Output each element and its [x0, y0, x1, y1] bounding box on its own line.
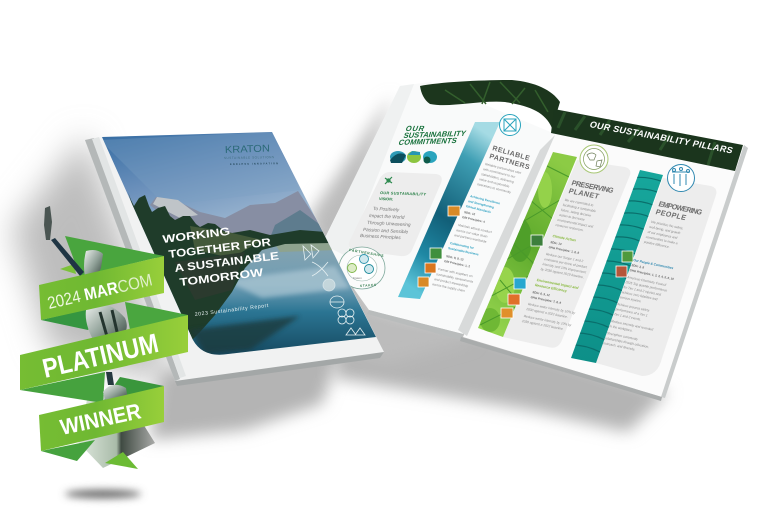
reliable partners text: with commitment to our: [483, 167, 517, 179]
icon: globe: [580, 145, 608, 173]
reliable partners text: Ethical Standards: [466, 204, 492, 214]
right page: [463, 132, 745, 397]
reliable partners text: PARTNERS: [488, 153, 531, 171]
left page heading: OUR: [404, 124, 427, 133]
reliable partners text: GRI Principles: 1, 2: [444, 259, 471, 269]
reliable partners text: across our value chain: [456, 228, 488, 239]
empowering people text: achieve zero fatalities and: [621, 290, 658, 301]
reliable partners text: Sustainable Business: [448, 246, 479, 256]
empowering people text: positive difference.: [643, 240, 671, 249]
reliable partners text: SDG: 12: [464, 210, 476, 216]
cover title: TOMORROW: [179, 267, 264, 289]
forest: [128, 192, 330, 340]
empowering people text: [603, 198, 704, 355]
empowering people text: PEOPLE: [654, 207, 688, 222]
kraton logo: SUSTAINABLE SOLUTIONS: [224, 155, 274, 160]
left page heading: COMMITMENTS: [397, 136, 458, 147]
banner: our sustainability pillars: OUR SUSTAINABILITY PILLARS: [588, 119, 734, 155]
empowering people text: American Chemistry Council: [627, 275, 667, 287]
lake: [152, 240, 376, 355]
preserving planet text: facilitating a sustainable: [562, 203, 597, 213]
partnerships badge: STAKES: [360, 283, 377, 288]
reliable partners text: operations to community: [477, 182, 512, 194]
cover photo: [102, 132, 376, 355]
empowering people text: outreach, and diversity.: [603, 341, 636, 352]
kraton logo: [224, 143, 278, 166]
reliable partners text: RELIABLE: [491, 145, 531, 163]
empowering people text: EMPOWERING: [657, 199, 704, 217]
preserving planet text: GHG Principles: 1, 6, 8: [548, 245, 580, 255]
reliable partners text: Maintain ethical conduct: [458, 223, 492, 234]
partnerships badge: PARTNERSHIPS: [349, 248, 385, 258]
reliable partners text: sustainability assessments: [436, 272, 474, 284]
cover title: A SUSTAINABLE: [174, 250, 280, 275]
reliable partners text: stakeholders, delivering: [481, 172, 514, 184]
icon: reliable partners: [500, 114, 520, 136]
panel: sustainability vision: OUR SUSTAINABILITY: [380, 191, 427, 197]
panel: sustainability vision: Passion and Sensible: [363, 227, 409, 234]
reliable partners text: Reliable partnerships start: [485, 162, 522, 175]
panel: sustainability vision: Impact the World: [369, 213, 405, 220]
SDG icons: preserving: [501, 235, 543, 318]
preserving planet text: by 2030 against 2019 baseline.: [540, 267, 585, 279]
preserving planet text: PRESERVING: [570, 178, 616, 195]
empowering people text: We prioritize the safety,: [651, 220, 684, 230]
empowering people text: communities to make a: [645, 235, 678, 245]
cover subtitle: 2023 Sustainability Report: [195, 303, 269, 318]
preserving planet text: We are committed to: [564, 198, 594, 207]
preserving planet text: action to decrease: [559, 213, 586, 222]
preserving planet text: Reduce our Scope 1 and 2: [545, 252, 584, 263]
empowering people text: serious injuries.: [619, 295, 642, 303]
left page: [322, 82, 553, 334]
partnerships badge: Kraton: [353, 276, 362, 280]
left page heading: [397, 124, 468, 147]
ribbon: Winner: WINNER: [58, 398, 143, 440]
empowering people text: 2025 Top quartile performance: [625, 280, 668, 293]
ribbon: Platinum: PLATINUM: [40, 328, 161, 384]
award floor shadow: [65, 490, 141, 498]
preserving planet text: Environmental Impact and: [536, 278, 579, 290]
reflection highlights: [225, 266, 350, 298]
empowering people text: in the workplace.: [609, 324, 634, 333]
preserving planet text: Climate Action: [552, 234, 576, 242]
ribbon: 2024 MarCom: [39, 256, 164, 320]
reliable partners text: GRI Principles: 4: [462, 215, 486, 224]
preserving planet text: GHG Principles: 7, 8, 9: [530, 295, 562, 305]
preserving planet text: 2030 against a 2022 baseline.: [526, 307, 569, 319]
panel: sustainability vision: VISION:: [379, 197, 394, 202]
cover pillar icons: [303, 245, 365, 335]
left page heading: SUSTAINABILITY: [402, 129, 468, 140]
preserving planet text: PLANET: [567, 186, 601, 201]
preserving planet text: Reduce water intensity by 10% by: [527, 302, 576, 315]
reliable partners text: and Strengthening: [468, 199, 495, 209]
ribbon: 2024 MarCom: 2024 MARCOM: [46, 270, 154, 313]
reliable partners text: Collaborating for: [450, 241, 475, 250]
empowering people text: Tier 1 and 2 events.: [613, 312, 642, 322]
water strip: [398, 122, 500, 299]
ribbon: Platinum: [20, 315, 188, 390]
empowering people text: GHG Principles: 1, 2, 3, 4, 5, 6, 10: [629, 268, 675, 281]
empowering people text: Reduce intensity and recorded: [611, 319, 654, 332]
preserving planet text: [520, 178, 621, 332]
reliable partners text: Partner with suppliers on: [438, 267, 473, 278]
SDG icons: empowering: [616, 251, 633, 277]
background soft shadows: [12, 95, 668, 440]
empowering people text: for Tier 1 and 2 injuries and: [623, 285, 662, 297]
panel: preserving planet: [465, 145, 630, 348]
kraton logo: KRATON: [225, 143, 270, 156]
preserving planet text: intensity and 10% improvement: [542, 262, 587, 274]
back ribbon folds: [20, 236, 188, 469]
three commitment icons: [390, 151, 437, 164]
banner: our sustainability pillars: [551, 109, 743, 171]
preserving planet text: Reduce waste intensity by 10% by: [523, 314, 572, 327]
mountains: [150, 191, 327, 240]
preserving planet text: future, taking decisive: [560, 208, 592, 218]
reliable partners text: and partners worldwide: [454, 233, 487, 244]
cover title: [162, 226, 280, 289]
award: 2024 MarCom Platinum winner: [20, 206, 188, 498]
empowering people text: Achieve process safety: [617, 302, 650, 313]
closed report cover: [85, 125, 390, 386]
icon: people: [668, 164, 694, 192]
icon: vision mark: [385, 177, 392, 184]
reliable partners text: Achieving Excellence: [470, 194, 501, 205]
empowering people text: Strengthen community: [606, 331, 639, 341]
reliable partners text: [432, 145, 531, 293]
cover page block: [85, 140, 384, 386]
preserving planet text: emissions per tonne of product: [544, 257, 588, 269]
empowering people text: relationships through education,: [605, 336, 650, 349]
empowering people text: of our employees and: [647, 230, 678, 240]
preserving planet text: 2030 against a 2022 baseline.: [521, 319, 564, 331]
panel: sustainability vision: [349, 172, 442, 256]
partnerships badge: [339, 247, 385, 289]
panel: sustainability vision: Business Principles: [360, 233, 401, 240]
ribbon: Winner: [39, 386, 164, 451]
trophy base: [78, 395, 155, 468]
kraton logo: ENDLESS INNOVATION: [230, 162, 278, 166]
reliable partners text: value and responsible: [479, 177, 510, 189]
panel: sustainability vision: Through Unwavering: [367, 220, 411, 227]
panel: sustainability vision: To Positively: [373, 206, 400, 212]
preserving planet text: Resource Efficiency: [534, 283, 568, 293]
cover title: WORKING: [162, 226, 231, 246]
empowering people text: well-being, and growth: [649, 225, 681, 235]
empowering people text: performance of a Tier 1: [615, 307, 648, 318]
SDG icons on left page: [418, 206, 460, 287]
preserving planet text: environmental impact and: [557, 218, 594, 229]
trophy figure: [44, 206, 128, 402]
empowering people text: Our People & Communities: [633, 258, 674, 270]
reliable partners text: SDG: 8, 9, 12: [446, 254, 464, 262]
fern banner left: [420, 80, 560, 128]
dark foreground reflection: [190, 316, 300, 354]
preserving planet text: SDG: 6, 9, 12: [532, 290, 551, 297]
reliable partners text: and product stewardship: [434, 277, 469, 288]
preserving planet text: conserve resources.: [555, 223, 584, 232]
reliable partners text: across the supply chain: [432, 282, 465, 293]
preserving planet text: SDG: 13: [550, 240, 563, 246]
cover title: TOGETHER FOR: [168, 237, 272, 261]
panel: empowering people: [560, 164, 716, 376]
empowering people text: SDG: 3, 8: [631, 263, 645, 270]
open report spread: [322, 80, 748, 401]
